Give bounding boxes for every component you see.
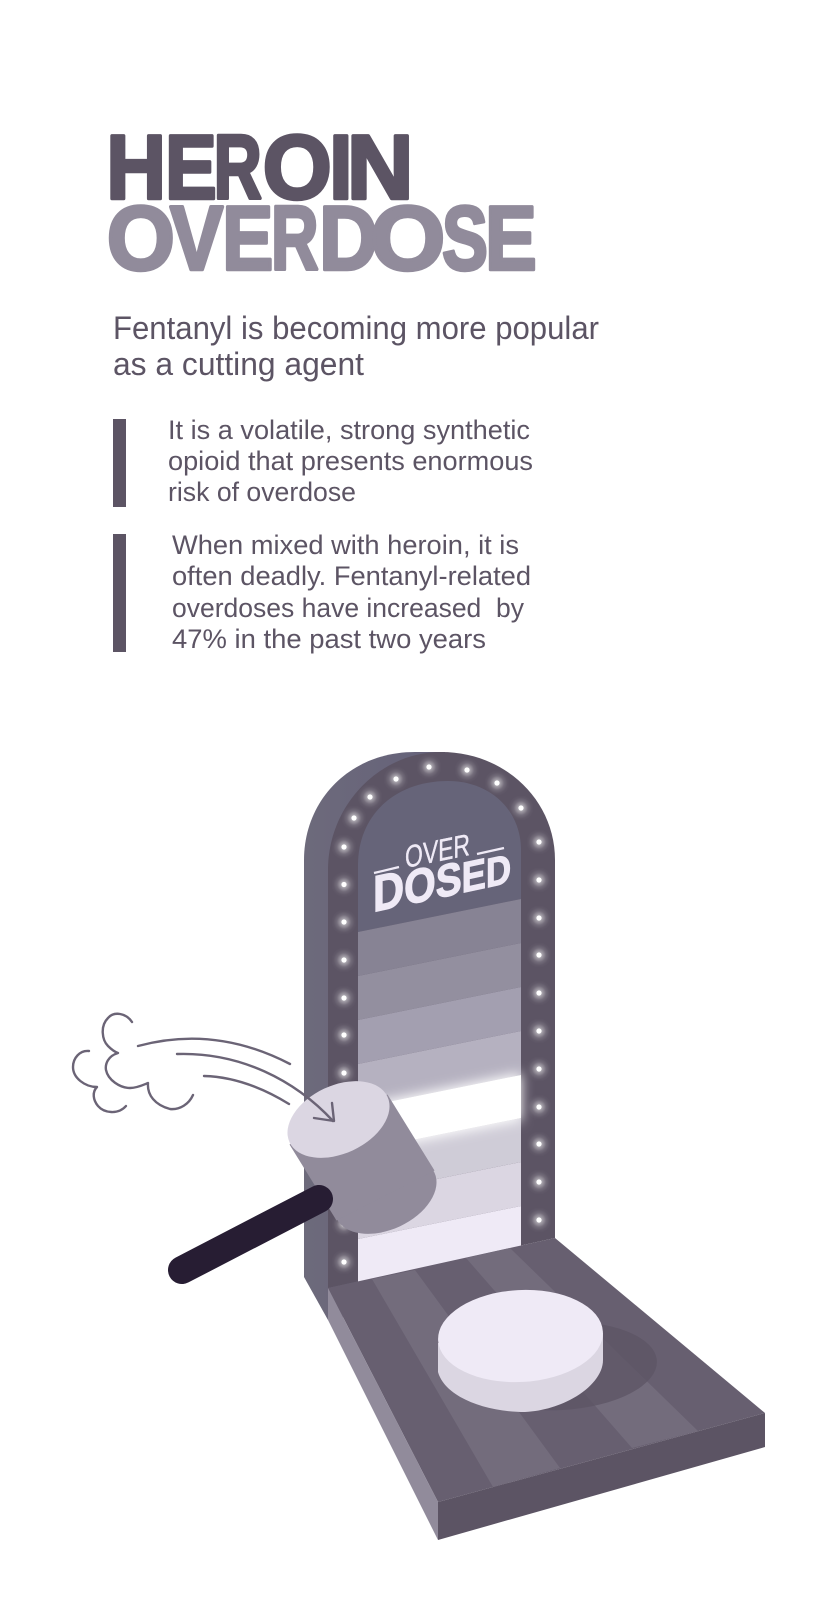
- infographic canvas: [72, 133, 765, 1540]
- title line: overdose: E: [485, 188, 537, 289]
- sign text: over dosed: [373, 827, 511, 923]
- base left side: [328, 1288, 438, 1540]
- mallet head body: [290, 1094, 449, 1249]
- sign panel: [358, 781, 521, 932]
- title line: overdose: R: [271, 188, 319, 289]
- base top: [328, 1238, 765, 1502]
- title line: heroin: N: [347, 117, 413, 218]
- dosed: DOSED: [373, 836, 511, 923]
- title line: overdose: O: [370, 188, 445, 289]
- machine front frame: [328, 752, 555, 1288]
- strength scale: [358, 781, 521, 1282]
- text block 1: It is a volatile, strong synthetic: [168, 415, 530, 445]
- machine base: [328, 1238, 765, 1540]
- text block 2: overdoses have increased by: [172, 593, 524, 623]
- title line: heroin: H: [106, 117, 166, 218]
- title line: overdose: V: [170, 188, 223, 289]
- bullet bar 2: [113, 534, 126, 652]
- pill on base: [436, 1286, 605, 1412]
- mallet handle: [182, 1199, 319, 1270]
- text block 1: [168, 415, 533, 507]
- title line: overdose: O: [107, 188, 175, 289]
- title line: heroin: I: [329, 117, 352, 218]
- mallet: [182, 1066, 449, 1270]
- title line: heroin: R: [214, 117, 262, 218]
- glowing level: [386, 1066, 530, 1146]
- mallet head face: [275, 1066, 402, 1173]
- text block 1: opioid that presents enormous: [168, 446, 533, 476]
- base stripes: [372, 1270, 560, 1487]
- motion lines and arrow: [138, 1039, 334, 1121]
- subheading: Fentanyl is becoming more popular: [113, 310, 599, 346]
- title line: heroin: O: [263, 117, 332, 218]
- subheading: [113, 310, 599, 382]
- title: [106, 117, 537, 289]
- machine side panel: [304, 752, 445, 1320]
- subheading: as a cutting agent: [113, 346, 364, 382]
- title line: overdose: S: [442, 188, 488, 289]
- text block 2: 47% in the past two years: [172, 624, 486, 654]
- title line: heroin: E: [165, 117, 217, 218]
- text block 2: When mixed with heroin, it is: [172, 530, 519, 560]
- high striker machine illustration: [73, 752, 765, 1540]
- title line: overdose: E: [222, 188, 273, 289]
- pill shadow: [461, 1317, 659, 1415]
- dust cloud: [73, 1014, 193, 1112]
- base front: [438, 1413, 765, 1540]
- over: OVER: [405, 827, 470, 875]
- text block 1: risk of overdose: [168, 477, 356, 507]
- title line: overdose: D: [319, 188, 378, 289]
- bullet bar 1: [113, 419, 126, 507]
- text block 2: [172, 530, 531, 654]
- text block 2: often deadly. Fentanyl-related: [172, 561, 531, 591]
- marquee lights: [331, 754, 552, 1275]
